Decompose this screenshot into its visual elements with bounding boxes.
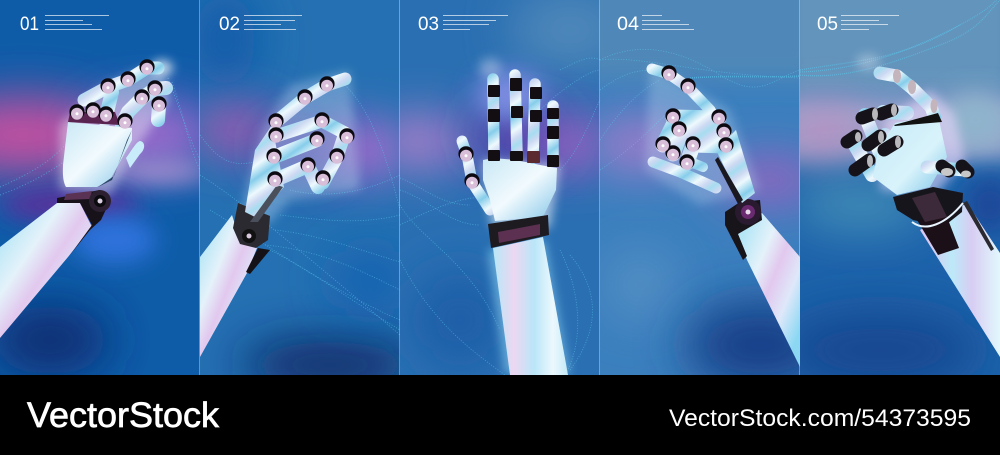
footer logo: VectorStock xyxy=(27,395,219,435)
panel 3 heading xyxy=(418,14,508,35)
fingers xyxy=(663,117,726,163)
thumb xyxy=(927,166,971,178)
black finger joints xyxy=(847,110,897,170)
index finger xyxy=(880,73,935,118)
thumb xyxy=(462,141,490,210)
fingers xyxy=(84,68,166,125)
panel 3 heading: 03 xyxy=(418,14,439,35)
panel dividers xyxy=(200,0,800,375)
wrist band xyxy=(488,215,549,248)
arm xyxy=(493,237,568,375)
arm xyxy=(0,203,92,338)
robot hand 1 xyxy=(0,59,173,338)
wrist and strap xyxy=(893,187,994,255)
robot hand 3 xyxy=(458,58,570,375)
thumb xyxy=(653,160,716,188)
robot hand 4 xyxy=(645,65,800,367)
back of hand xyxy=(245,125,284,218)
panel 4 heading xyxy=(617,14,694,35)
panel 1 heading xyxy=(20,14,109,35)
panel 2 heading: 02 xyxy=(219,14,240,35)
panel 1 heading: 01 xyxy=(20,14,39,35)
dotted wave lines xyxy=(200,0,1000,375)
robot hand 2 xyxy=(200,70,360,357)
panel 2 background xyxy=(200,0,400,375)
arm xyxy=(737,213,800,367)
thumb xyxy=(126,141,144,168)
arm xyxy=(200,215,257,357)
palm xyxy=(483,159,557,221)
footer bar xyxy=(0,375,1000,455)
index finger xyxy=(646,64,716,110)
wrist joint xyxy=(57,190,111,255)
wrist joint xyxy=(725,199,762,260)
panel 5 background xyxy=(800,0,1000,375)
arm xyxy=(920,203,1000,357)
footer url: VectorStock.com/54373595 xyxy=(669,405,971,432)
panel 4 background xyxy=(600,0,800,375)
panel 4 heading: 04 xyxy=(617,14,639,35)
panel 5 heading xyxy=(817,14,899,35)
fingers xyxy=(274,79,345,187)
fingers xyxy=(852,112,907,175)
palm xyxy=(63,122,132,187)
wrist joint xyxy=(233,203,270,274)
panel 5 heading: 05 xyxy=(817,14,838,35)
back of hand xyxy=(716,130,755,203)
panel 1 background xyxy=(0,0,220,375)
panel 3 background xyxy=(400,0,600,375)
panel 2 heading xyxy=(219,14,302,35)
fingers xyxy=(493,75,553,160)
palm xyxy=(873,115,947,195)
robot hand 5 xyxy=(847,54,1000,357)
